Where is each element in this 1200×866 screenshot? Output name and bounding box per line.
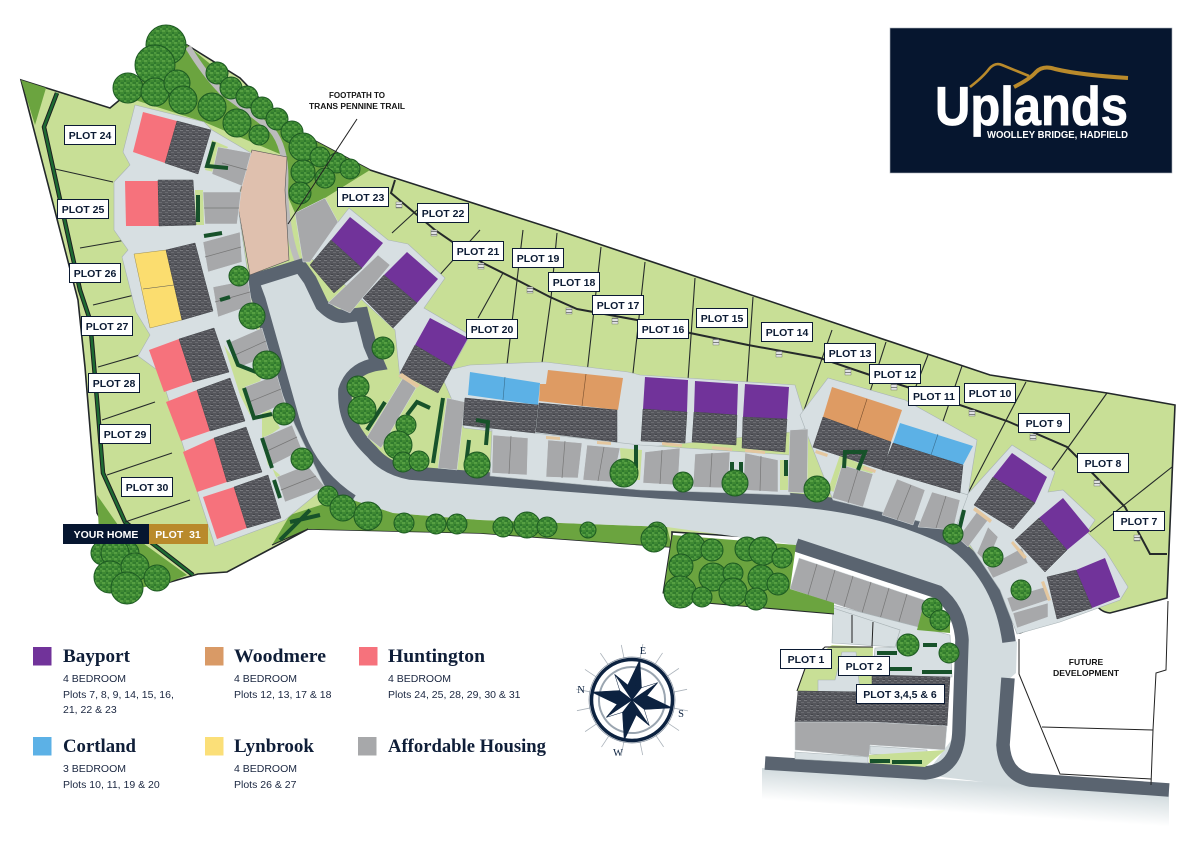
label: plot 12 xyxy=(870,364,920,384)
legend: Woodmere: Plots 12, 13, 17 & 18 xyxy=(234,689,332,701)
label: plot 10 xyxy=(964,384,1016,402)
logo panel: WOOLLEY BRIDGE, HADFIELD xyxy=(987,130,1128,141)
plot boundary lines xyxy=(55,169,1172,572)
footpath annotation: FOOTPATH TO xyxy=(329,91,385,100)
house type: Huntington plot 31 xyxy=(203,475,281,539)
gardens hedges xyxy=(198,142,964,762)
house type: Huntington plot 25 xyxy=(125,180,196,226)
legend: Bayport: Plots 7, 8, 9, 14, 15, 16, xyxy=(63,689,174,701)
house type: Bayport plot 16 xyxy=(641,377,688,443)
label: plot 14: PLOT 14 xyxy=(766,327,808,339)
compass rose: N xyxy=(577,685,585,696)
label: plot 20: PLOT 20 xyxy=(471,324,513,336)
legend: Bayport: Bayport xyxy=(63,647,131,667)
label: plot 11 xyxy=(908,386,960,406)
trees: road verge north xyxy=(347,337,1031,663)
label: plot 29: PLOT 29 xyxy=(104,429,146,441)
label: plot 12: PLOT 12 xyxy=(874,369,916,381)
label: plot 27: PLOT 27 xyxy=(86,321,128,333)
house type: Huntington plot 29 xyxy=(166,378,245,441)
house type: Huntington plot 24 xyxy=(133,112,211,174)
label: plot 23: PLOT 23 xyxy=(342,192,384,204)
future development area: FUTURE xyxy=(1069,657,1104,667)
label: plot 17 xyxy=(592,296,644,314)
label: plot 7: PLOT 7 xyxy=(1121,516,1158,528)
legend: Lynbrook: Lynbrook xyxy=(234,737,315,757)
label: plot 23 xyxy=(338,188,388,206)
label: plot 18 xyxy=(548,272,600,292)
road fade at the site edge xyxy=(762,768,1169,828)
legend: Huntington: Plots 24, 25, 28, 29, 30 & 31 xyxy=(388,689,521,701)
label: plot 24: PLOT 24 xyxy=(69,130,111,142)
footpath xyxy=(188,47,298,262)
legend: Lynbrook xyxy=(205,737,315,791)
trees: road verge west and south xyxy=(229,266,667,542)
house type: Bayport plot 21 xyxy=(400,318,468,393)
label: your home plot 31 xyxy=(63,524,208,544)
label: plot 1 xyxy=(780,650,832,668)
legend: Lynbrook: 4 BEDROOM xyxy=(234,763,297,775)
boundary hedge xyxy=(44,93,193,575)
legend: Bayport: 4 BEDROOM xyxy=(63,673,126,685)
label: plot 26 xyxy=(70,264,120,282)
label: plot 28 xyxy=(88,374,140,392)
compass rose xyxy=(565,633,699,767)
label: plot 15: PLOT 15 xyxy=(701,313,743,325)
legend: Cortland: Cortland xyxy=(63,737,137,757)
logo panel xyxy=(890,28,1172,173)
compass rose: W xyxy=(613,748,623,759)
house type: Huntington plot 30 xyxy=(183,427,262,492)
label: plot 16: PLOT 16 xyxy=(642,324,684,336)
legend: Bayport: 21, 22 & 23 xyxy=(63,704,117,716)
label: plot 21 xyxy=(452,242,504,260)
label: plot 16 xyxy=(638,320,688,338)
plots 3 to 6: roofs xyxy=(795,675,950,726)
label: plot 1: PLOT 1 xyxy=(788,654,825,666)
label: plot 11: PLOT 11 xyxy=(913,391,955,403)
compass rose: E xyxy=(640,646,646,657)
trees: north-west woodland xyxy=(113,25,360,204)
label: plots 3, 4, 5 and 6: PLOT 3,4,5 & 6 xyxy=(863,689,937,701)
legend: Woodmere xyxy=(205,647,332,701)
label: plot 13 xyxy=(824,344,876,362)
shared drive hammerhead xyxy=(238,150,289,275)
legend: Affordable Housing: Affordable Housing xyxy=(388,737,547,757)
parking bays xyxy=(203,147,1048,632)
parking bay dividers xyxy=(204,163,946,625)
green space with trees xyxy=(641,526,834,614)
label: plot 10: PLOT 10 xyxy=(969,388,1011,400)
future development area xyxy=(1019,601,1168,785)
logo: gold hills xyxy=(970,64,1128,87)
house type: Cortland plots 10 and 11 xyxy=(882,423,973,493)
label: plot 13: PLOT 13 xyxy=(829,348,871,360)
label: plot 9 xyxy=(1018,414,1070,432)
house type: Lynbrook plots 26 and 27 xyxy=(134,243,213,328)
label: plot 19 xyxy=(512,248,564,268)
door canopies xyxy=(398,373,1051,601)
legend: Huntington xyxy=(359,647,521,701)
legend: Cortland xyxy=(33,737,160,791)
road kerbs xyxy=(252,266,1169,790)
label: plot 21: PLOT 21 xyxy=(457,246,499,258)
plots 3 to 6: affordable housing terrace xyxy=(795,722,947,767)
woodland belts xyxy=(21,45,672,590)
label: plot 22: PLOT 22 xyxy=(422,208,464,220)
north terrace plates xyxy=(440,362,808,495)
plots 1 to 6: courtyard and road link xyxy=(813,600,952,677)
label: plot 7 xyxy=(1114,512,1164,530)
legend: Bayport xyxy=(33,647,174,716)
house type: Bayport plot 8 xyxy=(1015,498,1090,572)
label: plot 2: PLOT 2 xyxy=(846,661,883,673)
label: plot 24 xyxy=(64,126,116,144)
west row hardstanding xyxy=(114,105,325,546)
site base: garden land xyxy=(21,45,1175,633)
house type: Bayport plot 23 xyxy=(310,217,383,293)
compass rose: S xyxy=(678,709,684,720)
house type: Bayport plot 15 xyxy=(692,381,738,445)
plots 1 to 6: front gardens xyxy=(797,645,873,693)
label: plot 25: PLOT 25 xyxy=(62,204,104,216)
legend: Woodmere: Woodmere xyxy=(234,647,326,667)
label: plot 28: PLOT 28 xyxy=(93,378,135,390)
label: plot 30 xyxy=(122,478,172,496)
main estate road surface xyxy=(255,268,1169,797)
north-west house plates xyxy=(310,208,470,378)
label: your home plot 31: YOUR HOME xyxy=(74,529,138,541)
legend: Woodmere: 4 BEDROOM xyxy=(234,673,297,685)
green pockets xyxy=(195,140,875,500)
label: plot 22 xyxy=(418,204,468,222)
footpath annotation: TRANS PENNINE TRAIL xyxy=(309,102,405,111)
label: plots 3, 4, 5 and 6 xyxy=(856,684,944,704)
house type: Woodmere plots 17 and 18 xyxy=(536,370,623,442)
label: plot 8: PLOT 8 xyxy=(1085,458,1122,470)
future development area: DEVELOPMENT xyxy=(1053,668,1120,678)
legend: Cortland: 3 BEDROOM xyxy=(63,763,126,775)
hatched garden stores xyxy=(396,202,1140,541)
legend: Cortland: Plots 10, 11, 19 & 20 xyxy=(63,779,160,791)
house type: Bayport plot 7 xyxy=(1047,558,1120,619)
label: plot 8 xyxy=(1078,454,1128,472)
label: plot 15 xyxy=(696,308,748,328)
legend: Huntington: Huntington xyxy=(388,647,486,667)
label: plot 17: PLOT 17 xyxy=(597,300,639,312)
house type: Bayport plot 22 xyxy=(363,252,438,328)
label: your home plot 31: PLOT 31 xyxy=(155,529,201,541)
north-east terrace and house plates xyxy=(800,378,1128,634)
legend: Lynbrook: Plots 26 & 27 xyxy=(234,779,297,791)
label: plot 29 xyxy=(100,424,150,444)
label: plot 30: PLOT 30 xyxy=(126,482,168,494)
label: plot 27 xyxy=(82,316,132,336)
label: plot 14 xyxy=(762,322,812,342)
label: plot 26: PLOT 26 xyxy=(74,268,116,280)
label: plot 25 xyxy=(58,200,108,218)
label: plot 20 xyxy=(466,320,518,338)
label: plot 2 xyxy=(838,656,890,676)
label: plot 18: PLOT 18 xyxy=(553,277,595,289)
house type: Bayport plot 9 xyxy=(974,453,1047,529)
house type: Bayport plot 14 xyxy=(742,384,789,452)
house type: Woodmere plots 12 and 13 xyxy=(813,387,902,470)
logo panel: Uplands xyxy=(935,75,1128,137)
label: plot 9: PLOT 9 xyxy=(1026,418,1063,430)
label: plot 19: PLOT 19 xyxy=(517,253,559,265)
footpath annotation xyxy=(288,91,405,224)
legend: Huntington: 4 BEDROOM xyxy=(388,673,451,685)
house type: Huntington plot 28 xyxy=(149,328,229,392)
house type: Cortland plots 19 and 20 xyxy=(463,372,540,433)
trees: south-west corner xyxy=(91,539,170,604)
